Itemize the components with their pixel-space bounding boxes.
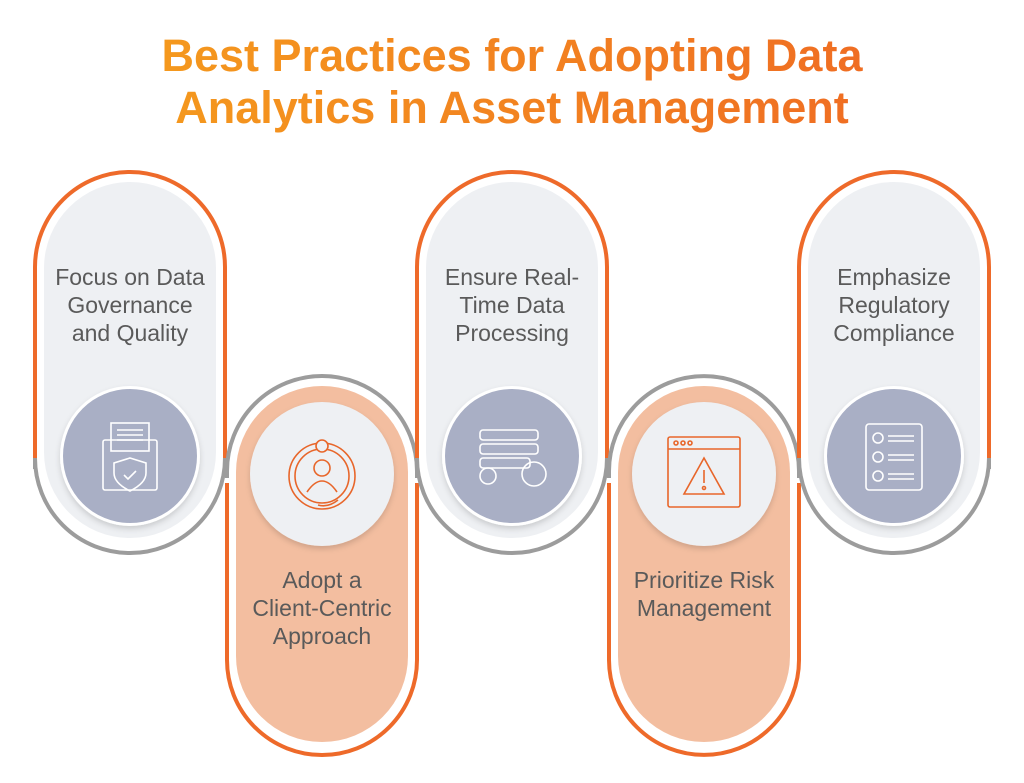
panel: pill 4 — [609, 376, 799, 755]
text: pill 5 — [833, 264, 955, 346]
text: pill 3: Ensure Real- — [445, 264, 579, 290]
text: pill 1: and Quality — [72, 320, 188, 346]
text: pill 2 — [252, 567, 392, 649]
panel: pill 1 — [35, 172, 225, 553]
title: Best Practices for Adopting Data — [162, 30, 862, 81]
title — [0, 30, 1024, 134]
panel: pill 5 — [799, 172, 989, 553]
title: Analytics in Asset Management — [175, 82, 849, 133]
text: pill 5: Compliance — [833, 320, 955, 346]
text: pill 1 — [55, 264, 205, 346]
text: pill 2: Approach — [273, 623, 371, 649]
text: pill 3: Time Data — [459, 292, 565, 318]
text: pill 1: Focus on Data — [55, 264, 205, 290]
text: pill 2: Adopt a — [282, 567, 362, 593]
panel: pill 3 — [417, 172, 607, 553]
panel: pill 2 — [227, 376, 417, 755]
text: pill 5: Regulatory — [838, 292, 950, 318]
text: pill 5: Emphasize — [837, 264, 951, 290]
text: pill 4 — [634, 567, 774, 621]
text: pill 3: Processing — [455, 320, 569, 346]
text: pill 2: Client-Centric — [252, 595, 392, 621]
text: pill 3 — [445, 264, 579, 346]
text: pill 4: Prioritize Risk — [634, 567, 774, 593]
text: pill 1: Governance — [67, 292, 193, 318]
text: pill 4: Management — [637, 595, 771, 621]
